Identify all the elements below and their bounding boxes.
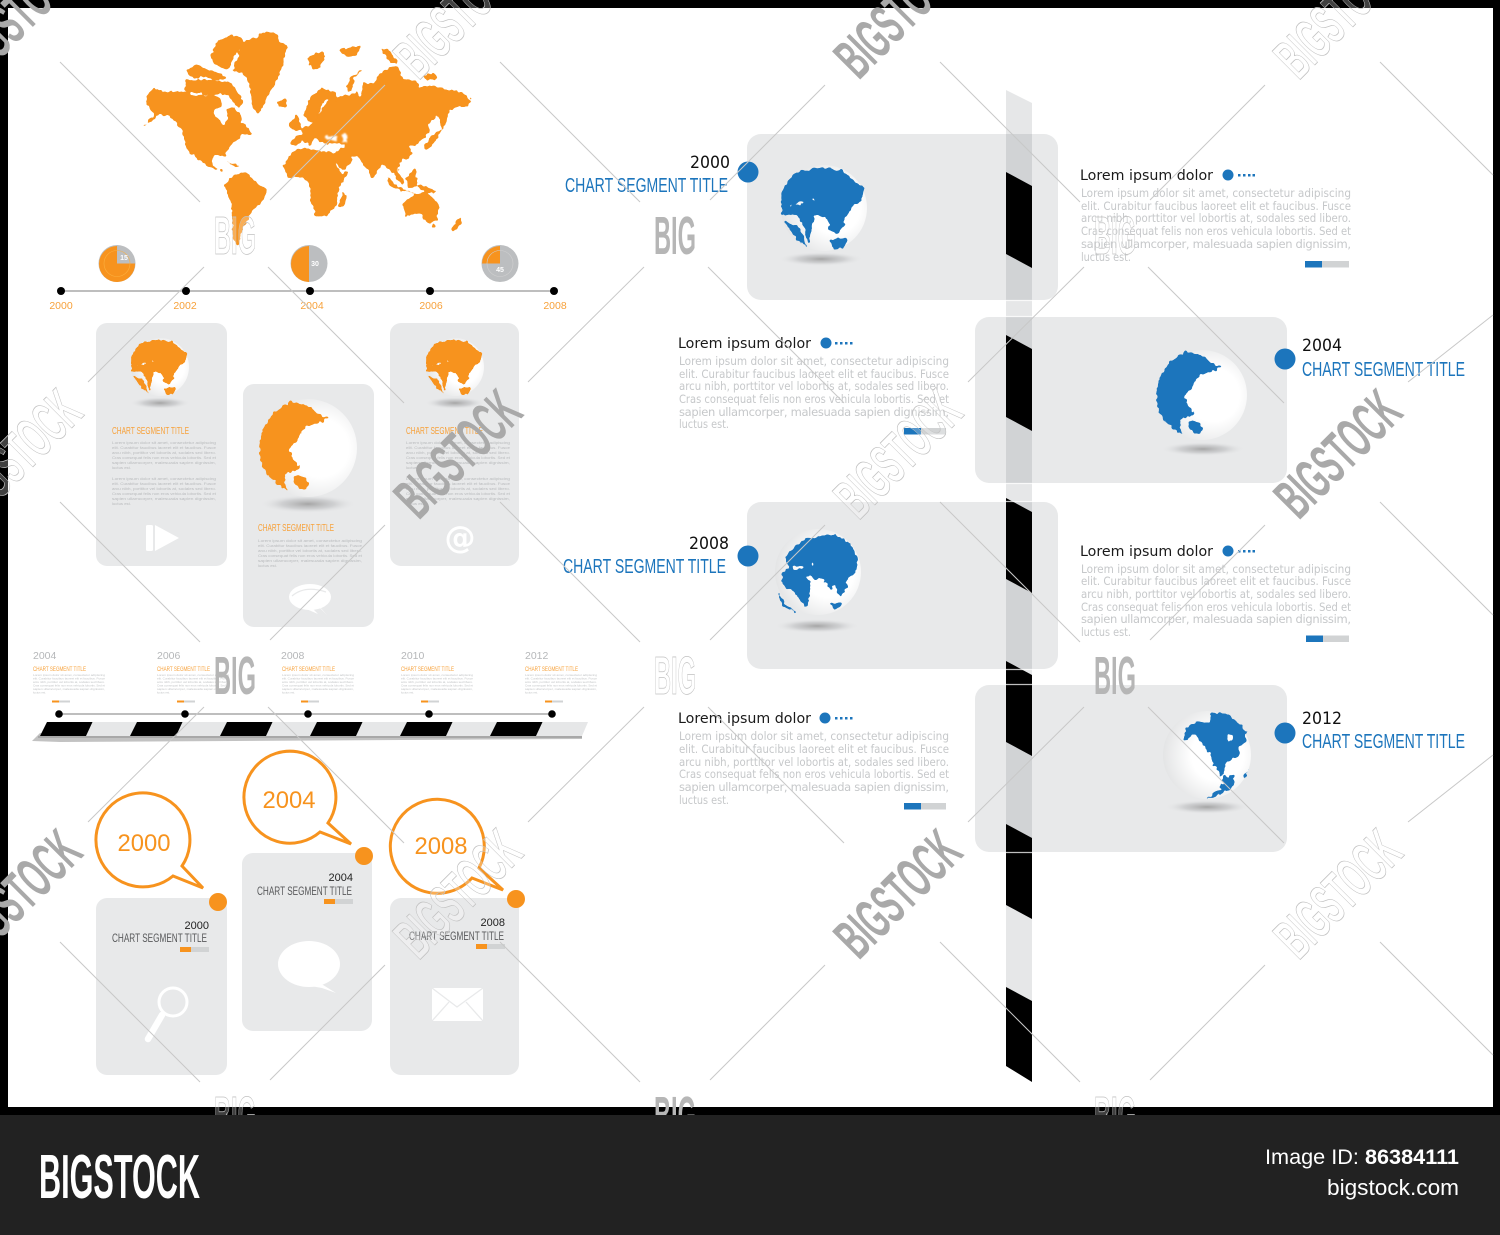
callout: bubble 2004: 2004 <box>262 787 316 814</box>
text block: lorem 2 <box>678 336 949 434</box>
callout: bubble 2004 <box>244 751 351 844</box>
globe: blue eurasia africa <box>775 529 861 633</box>
text block: lorem 3: luctus est. <box>1081 625 1131 639</box>
icon: at sign: @ <box>444 520 476 556</box>
text block: lorem 3: arcu nibh, porttitor vel lobortis at, sodales sed libero. <box>1081 587 1351 601</box>
panel: lower card 2000: 2000 <box>185 920 209 932</box>
column 2004: Lorem ipsum dolor sit amet, consectetur adipiscing <box>33 673 105 677</box>
card body text: Lorem ipsum dolor sit amet, consectetur adipiscing <box>406 440 510 445</box>
icon: envelope <box>432 988 483 1021</box>
label: 2008 chart segment: CHART SEGMENT TITLE <box>563 556 726 578</box>
top year timeline: 2008 <box>543 300 567 312</box>
globe: blue pacific <box>1157 350 1247 456</box>
text block: lorem 4: sapien ullamcorper, malesuada sapien dignissim, <box>679 780 949 794</box>
panel: left orange card 1 <box>96 323 227 566</box>
card body text: elit. Curabitur faucibus laoreet elit et faucibus. Fusce <box>112 481 217 486</box>
panel: lower card 2004: CHART SEGMENT TITLE <box>257 884 352 898</box>
icon: play <box>146 525 179 551</box>
label: 2000 chart segment: CHART SEGMENT TITLE <box>565 175 728 197</box>
label: 2000 chart segment <box>565 153 758 197</box>
column 2006: 2006 <box>157 650 181 662</box>
card body text: Cras consequat felis non eros vehicula lobortis. Sed et <box>258 553 363 558</box>
panel: left orange card 2 <box>243 384 374 627</box>
column 2012: elit. Curabitur faucibus laoreet elit et faucibus. Fusce <box>525 676 597 680</box>
column 2010: 2010 <box>401 650 425 662</box>
watermark: BIG text: BIG <box>654 1086 696 1146</box>
watermark: BIGSTOCK diagonal text: BIGSTOCK <box>822 378 974 530</box>
text block: lorem 3: elit. Curabitur faucibus laoreet elit et faucibus. Fusce <box>1081 574 1351 588</box>
text block: lorem 2: Lorem ipsum dolor <box>678 336 811 352</box>
card body text: elit. Curabitur faucibus laoreet elit et faucibus. Fusce <box>406 445 511 450</box>
column 2004: Cras consequat felis non eros vehicula lobortis. Sed et <box>33 684 105 688</box>
card body text: Cras consequat felis non eros vehicula lobortis. Sed et <box>112 455 217 460</box>
globe: orange pacific large <box>259 399 357 513</box>
watermark: BIG text: BIG <box>654 206 696 266</box>
card body text: sapien ullamcorper, malesuada sapien dignissim, <box>112 460 216 465</box>
pie marker 15: 15 <box>120 255 128 262</box>
card body text: sapien ullamcorper, malesuada sapien dignissim, <box>406 496 510 501</box>
label: 2004 chart segment <box>1274 336 1465 381</box>
column 2012: CHART SEGMENT TITLE <box>525 667 578 673</box>
icon: chat bubbles <box>289 584 331 615</box>
column 2010: Cras consequat felis non eros vehicula lobortis. Sed et <box>401 684 473 688</box>
column 2008: sapien ullamcorper, malesuada sapien dignissim, <box>282 687 354 691</box>
text: BIG <box>1094 206 1136 266</box>
card body text: sapien ullamcorper, malesuada sapien dignissim, <box>112 496 216 501</box>
text block: lorem 2: elit. Curabitur faucibus laoreet elit et faucibus. Fusce <box>679 367 949 381</box>
column 2004: sapien ullamcorper, malesuada sapien dignissim, <box>33 687 105 691</box>
pie marker 45 <box>482 245 518 282</box>
panel: lower card 2004 <box>242 847 373 1031</box>
text block: lorem 3: Lorem ipsum dolor sit amet, consectetur adipiscing <box>1081 562 1351 576</box>
panel: lower card 2000 <box>96 893 227 1075</box>
label: 2008 chart segment: 2008 <box>689 534 729 554</box>
label: 2000 chart segment: 2000 <box>690 153 730 173</box>
card body text: Cras consequat felis non eros vehicula lobortis. Sed et <box>406 491 511 496</box>
text block: lorem 4 <box>678 711 949 810</box>
column 2004: 2004 <box>33 650 57 662</box>
card title: CHART SEGMENT TITLE <box>406 426 483 437</box>
column 2008: CHART SEGMENT TITLE <box>282 667 335 673</box>
text block: lorem 2: luctus est. <box>679 417 729 431</box>
column 2012: sapien ullamcorper, malesuada sapien dignissim, <box>525 687 597 691</box>
card body text: arcu nibh, porttitor vel lobortis at, sodales sed libero. <box>258 548 362 553</box>
callout: bubble 2008: 2008 <box>414 833 468 860</box>
text block: lorem 2: Cras consequat felis non eros vehicula lobortis. Sed et <box>679 392 949 406</box>
callout: bubble 2000: 2000 <box>118 830 170 857</box>
card body text: Cras consequat felis non eros vehicula lobortis. Sed et <box>406 455 511 460</box>
panel: lower card 2004: 2004 <box>329 872 353 884</box>
watermark: BIG text: BIG <box>654 646 696 706</box>
top year timeline: 2006 <box>419 300 443 312</box>
pie marker 30 <box>290 245 328 282</box>
watermark: BIGSTOCK diagonal text <box>0 0 1414 970</box>
column 2006: Lorem ipsum dolor sit amet, consectetur adipiscing <box>157 673 229 677</box>
column 2006: arcu nibh, porttitor vel lobortis at, sodales sed libero. <box>157 680 229 684</box>
text block: lorem 1 <box>1080 168 1351 268</box>
watermark: BIG text: BIG <box>214 646 256 706</box>
text: BIG <box>1094 1086 1136 1146</box>
card body text: Cras consequat felis non eros vehicula lobortis. Sed et <box>112 491 217 496</box>
column 2006 <box>157 650 229 702</box>
card title: CHART SEGMENT TITLE <box>112 426 189 437</box>
card body text: sapien ullamcorper, malesuada sapien dignissim, <box>406 460 510 465</box>
card body text: arcu nibh, porttitor vel lobortis at, sodales sed libero. <box>112 486 216 491</box>
vertical striped ribbon timeline <box>1006 90 1032 1082</box>
top year timeline: 2000 <box>49 300 73 312</box>
column 2012: Lorem ipsum dolor sit amet, consectetur adipiscing <box>525 673 597 677</box>
globe: blue americas <box>1163 711 1251 814</box>
column 2012: 2012 <box>525 650 549 662</box>
card body text: luctus est. <box>112 501 131 506</box>
globe: blue asia <box>779 165 867 266</box>
card body text: elit. Curabitur faucibus laoreet elit et faucibus. Fusce <box>406 481 511 486</box>
panel: right card 2012 <box>975 685 1287 852</box>
column 2006: sapien ullamcorper, malesuada sapien dignissim, <box>157 687 229 691</box>
top year timeline: 2004 <box>300 300 324 312</box>
card body text: elit. Curabitur faucibus laoreet elit et faucibus. Fusce <box>258 543 363 548</box>
card body text <box>112 440 217 506</box>
column 2012 <box>525 650 597 702</box>
text block: lorem 1: sapien ullamcorper, malesuada sapien dignissim, <box>1081 237 1351 251</box>
column 2004: luctus est. <box>33 690 46 694</box>
text block: lorem 2: arcu nibh, porttitor vel lobortis at, sodales sed libero. <box>679 379 949 393</box>
column 2010: CHART SEGMENT TITLE <box>401 667 454 673</box>
top year timeline: 2002 <box>173 300 197 312</box>
column 2010: arcu nibh, porttitor vel lobortis at, sodales sed libero. <box>401 680 473 684</box>
text block: lorem 1: elit. Curabitur faucibus laoreet elit et faucibus. Fusce <box>1081 199 1351 213</box>
column 2008: Lorem ipsum dolor sit amet, consectetur adipiscing <box>282 673 354 677</box>
panel: lower card 2000: CHART SEGMENT TITLE <box>112 931 207 945</box>
column 2004 <box>33 650 105 702</box>
column 2010: elit. Curabitur faucibus laoreet elit et faucibus. Fusce <box>401 676 473 680</box>
card body text: Lorem ipsum dolor sit amet, consectetur adipiscing <box>406 476 510 481</box>
globe: orange asia small <box>425 338 485 409</box>
horizontal striped ribbon timeline <box>32 710 588 742</box>
text block: lorem 4: arcu nibh, porttitor vel lobortis at, sodales sed libero. <box>679 755 949 769</box>
text block: lorem 1: Cras consequat felis non eros vehicula lobortis. Sed et <box>1081 224 1351 238</box>
text block: lorem 2: Lorem ipsum dolor sit amet, consectetur adipiscing <box>679 354 949 368</box>
column 2006: CHART SEGMENT TITLE <box>157 667 210 673</box>
card body text <box>258 538 363 568</box>
column 2008: 2008 <box>281 650 305 662</box>
card body text: luctus est. <box>406 501 425 506</box>
footer url: bigstock.com <box>1327 1175 1459 1200</box>
top year timeline <box>49 287 567 312</box>
column 2004: arcu nibh, porttitor vel lobortis at, sodales sed libero. <box>33 680 105 684</box>
column 2008: Cras consequat felis non eros vehicula lobortis. Sed et <box>282 684 354 688</box>
footer bar: BIGSTOCK <box>39 1143 200 1212</box>
watermark: BIG text: BIG <box>214 1086 256 1146</box>
panel: right card 2004 <box>975 317 1287 483</box>
text block: lorem 1: arcu nibh, porttitor vel lobortis at, sodales sed libero. <box>1081 211 1351 225</box>
text block: lorem 3: Lorem ipsum dolor <box>1080 544 1213 560</box>
column 2010 <box>401 650 473 702</box>
text block: lorem 4: elit. Curabitur faucibus laoreet elit et faucibus. Fusce <box>679 742 949 756</box>
card body text: luctus est. <box>112 465 131 470</box>
column 2006: elit. Curabitur faucibus laoreet elit et faucibus. Fusce <box>157 676 229 680</box>
watermark: BIGSTOCK diagonal text: BIGSTOCK <box>822 818 974 970</box>
card body text: elit. Curabitur faucibus laoreet elit et faucibus. Fusce <box>112 445 217 450</box>
watermark: BIG text <box>214 206 1136 1146</box>
column 2004: elit. Curabitur faucibus laoreet elit et faucibus. Fusce <box>33 676 105 680</box>
panel: right card 2008 <box>747 502 1058 669</box>
card body text: sapien ullamcorper, malesuada sapien dignissim, <box>258 558 362 563</box>
label: 2012 chart segment: 2012 <box>1302 709 1342 729</box>
column 2008: elit. Curabitur faucibus laoreet elit et faucibus. Fusce <box>282 676 354 680</box>
card title: CHART SEGMENT TITLE <box>258 523 334 534</box>
pie marker 30: 30 <box>311 261 319 268</box>
column 2012: arcu nibh, porttitor vel lobortis at, sodales sed libero. <box>525 680 597 684</box>
card body text: arcu nibh, porttitor vel lobortis at, sodales sed libero. <box>406 486 510 491</box>
label: 2012 chart segment <box>1274 709 1465 753</box>
callout: bubble 2008 <box>390 799 503 893</box>
label: 2008 chart segment <box>563 534 758 578</box>
text block: lorem 1: luctus est. <box>1081 250 1131 264</box>
horizontal timeline column texts <box>33 650 597 702</box>
text block: lorem 3: sapien ullamcorper, malesuada sapien dignissim, <box>1081 612 1351 626</box>
text block: lorem 4: Lorem ipsum dolor <box>678 711 811 727</box>
card body text: arcu nibh, porttitor vel lobortis at, sodales sed libero. <box>112 450 216 455</box>
callout: bubble 2000 <box>96 793 203 888</box>
card body text: Lorem ipsum dolor sit amet, consectetur adipiscing <box>112 476 216 481</box>
pie marker 15 <box>98 245 136 282</box>
text block: lorem 4: Cras consequat felis non eros vehicula lobortis. Sed et <box>679 767 949 781</box>
icon: speech bubble <box>278 941 340 993</box>
footer bar <box>0 1115 1500 1235</box>
panel: left orange card 3 <box>390 323 519 566</box>
card body text <box>406 440 511 506</box>
watermark: BIGSTOCK diagonal text: BIGSTOCK <box>382 378 534 530</box>
footer image id: Image ID: 86384111 <box>1265 1145 1459 1169</box>
watermark: BIG text: BIG <box>214 206 256 266</box>
column 2008: arcu nibh, porttitor vel lobortis at, sodales sed libero. <box>282 680 354 684</box>
text block: lorem 3: Cras consequat felis non eros vehicula lobortis. Sed et <box>1081 600 1351 614</box>
text block: lorem 3 <box>1080 544 1351 642</box>
panel: lower card 2008 <box>390 890 525 1075</box>
column 2010: Lorem ipsum dolor sit amet, consectetur adipiscing <box>401 673 473 677</box>
column 2006: Cras consequat felis non eros vehicula lobortis. Sed et <box>157 684 229 688</box>
column 2008 <box>281 650 354 702</box>
pie marker 45: 45 <box>496 267 504 274</box>
globe: orange asia small <box>130 338 190 409</box>
text block: lorem 1: Lorem ipsum dolor sit amet, consectetur adipiscing <box>1081 186 1351 200</box>
column 2006: luctus est. <box>157 690 170 694</box>
card body text: luctus est. <box>258 563 277 568</box>
world map <box>144 32 472 245</box>
text block: lorem 2: sapien ullamcorper, malesuada sapien dignissim, <box>679 405 949 419</box>
card body text: luctus est. <box>406 465 425 470</box>
text: BIG <box>1094 646 1136 706</box>
column 2010: sapien ullamcorper, malesuada sapien dignissim, <box>401 687 473 691</box>
card body text: Lorem ipsum dolor sit amet, consectetur adipiscing <box>258 538 362 543</box>
panel: right card 2000 <box>747 134 1058 300</box>
column 2010: luctus est. <box>401 690 414 694</box>
panel: lower card 2008: 2008 <box>481 917 505 929</box>
column 2012: Cras consequat felis non eros vehicula lobortis. Sed et <box>525 684 597 688</box>
text block: lorem 4: Lorem ipsum dolor sit amet, consectetur adipiscing <box>679 729 949 743</box>
card body text: arcu nibh, porttitor vel lobortis at, sodales sed libero. <box>406 450 510 455</box>
card body text: Lorem ipsum dolor sit amet, consectetur adipiscing <box>112 440 216 445</box>
watermark: BIGSTOCK diagonal text: BIGSTOCK <box>382 818 534 970</box>
column 2012: luctus est. <box>525 690 538 694</box>
text block: lorem 4: luctus est. <box>679 793 729 807</box>
text block: lorem 1: Lorem ipsum dolor <box>1080 168 1213 184</box>
column 2008: luctus est. <box>282 690 295 694</box>
label: 2004 chart segment: 2004 <box>1302 336 1342 356</box>
panel: lower card 2008: CHART SEGMENT TITLE <box>409 929 504 943</box>
icon: magnifier <box>148 988 187 1039</box>
column 2004: CHART SEGMENT TITLE <box>33 667 86 673</box>
